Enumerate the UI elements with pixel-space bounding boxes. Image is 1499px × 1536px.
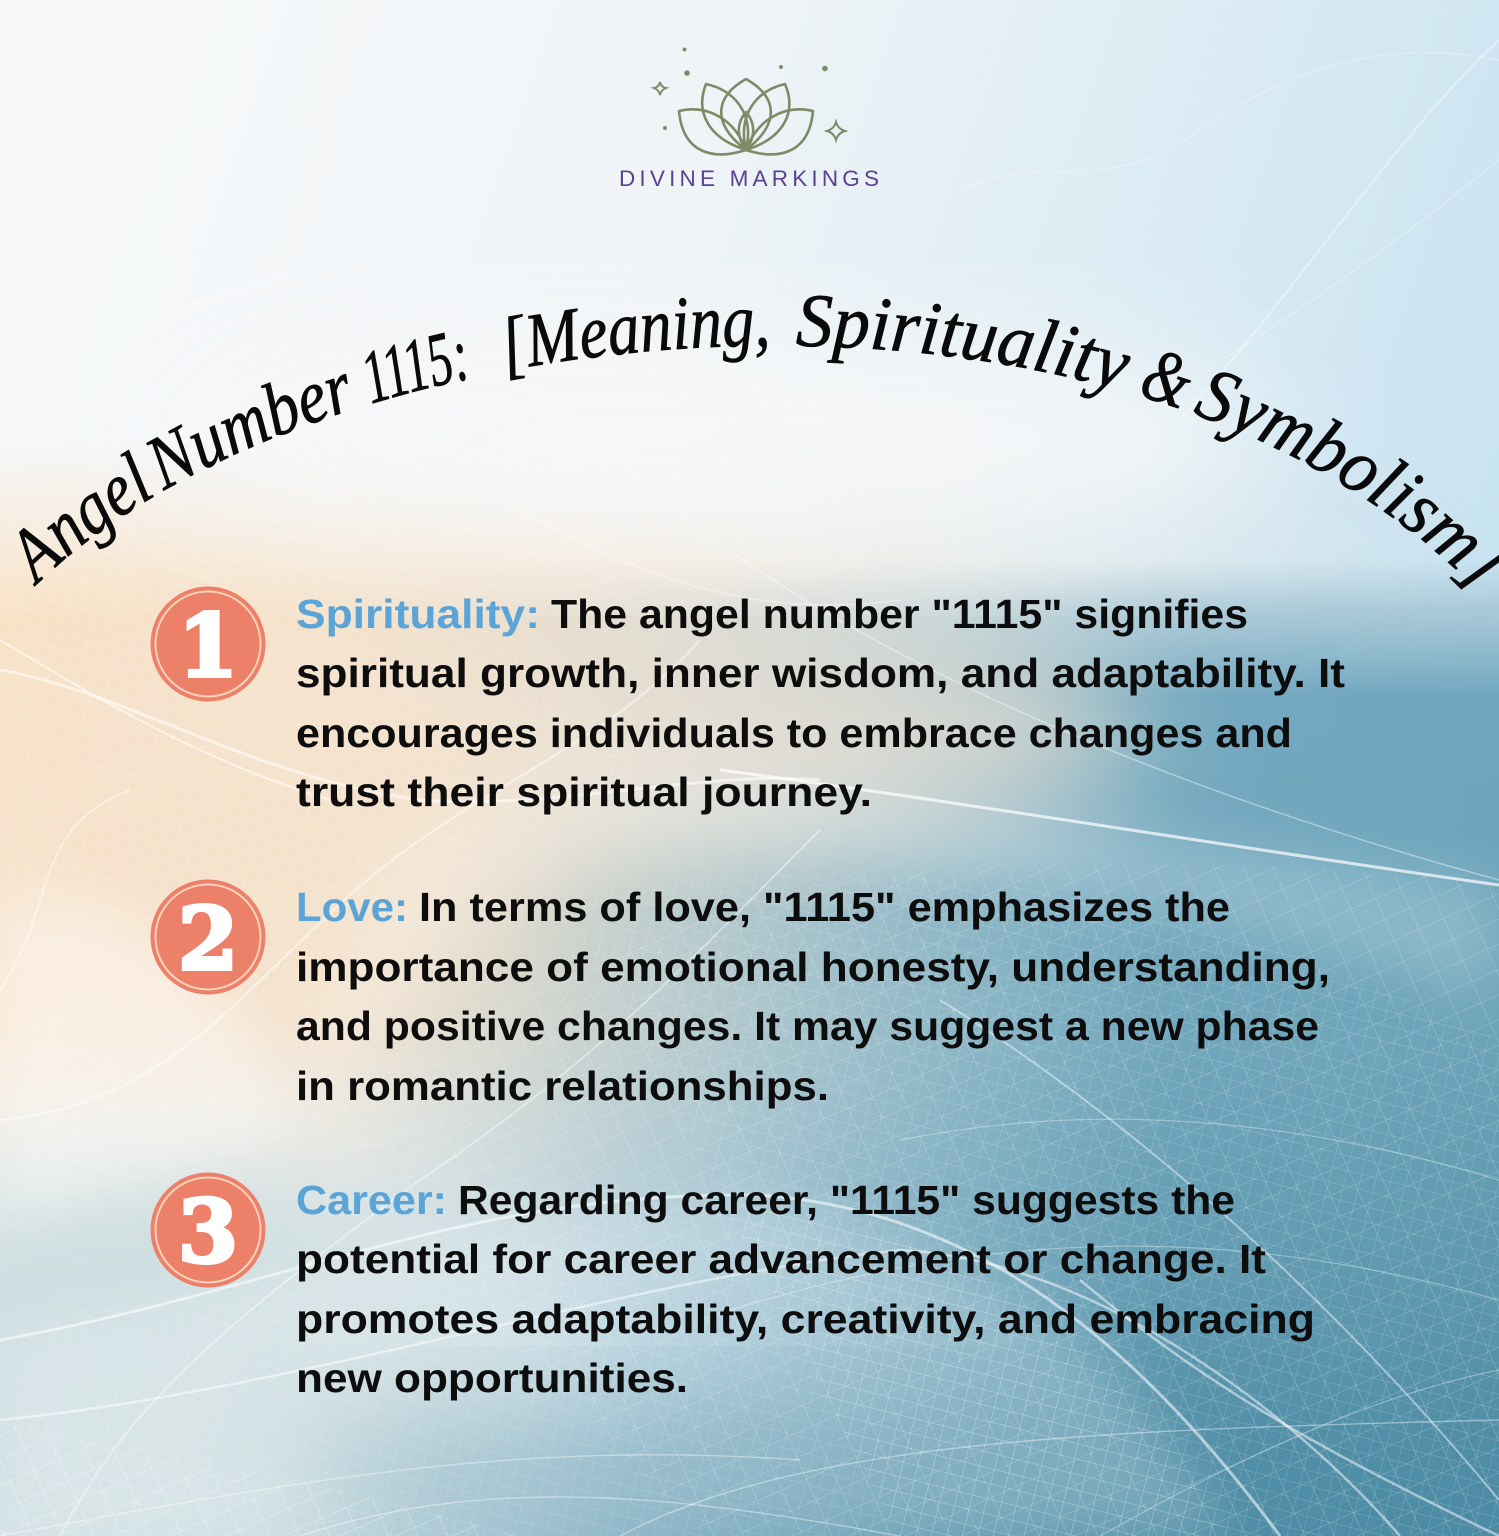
text: career: Career: bbox=[296, 1177, 447, 1223]
text: spirituality bbox=[296, 591, 1345, 815]
title: Spirituality bbox=[796, 296, 1131, 398]
text: love bbox=[296, 884, 1330, 1109]
text: career bbox=[296, 1177, 1315, 1401]
title bbox=[19, 296, 1499, 590]
text: love: importance of emotional honesty, understanding, bbox=[296, 944, 1330, 990]
icon: lotus bbox=[679, 79, 813, 154]
text: spirituality: The angel number "1115" signifies bbox=[551, 591, 1248, 637]
panel: spirituality bbox=[150, 586, 1345, 815]
badge 2 bbox=[150, 880, 266, 994]
title: 1115: bbox=[365, 332, 466, 404]
badge 1 bbox=[150, 586, 266, 702]
text: career: Regarding career, "1115" suggests the bbox=[458, 1177, 1235, 1223]
text: love: in romantic relationships. bbox=[296, 1063, 829, 1109]
text: spirituality: trust their spiritual journey. bbox=[296, 769, 872, 815]
text: spirituality: Spirituality: bbox=[296, 591, 540, 637]
text: career: potential for career advancement or change. It bbox=[296, 1236, 1266, 1282]
text: career: new opportunities. bbox=[296, 1355, 688, 1401]
panel: career bbox=[150, 1172, 1315, 1401]
logo wordmark: DIVINE MARKINGS bbox=[619, 166, 879, 191]
text: love: In terms of love, "1115" emphasizes the bbox=[419, 884, 1230, 930]
logo: Divine Markings bbox=[619, 48, 879, 191]
title: [Meaning, bbox=[508, 298, 767, 381]
title: Number bbox=[146, 374, 348, 492]
badge 3 bbox=[150, 1172, 266, 1288]
text: spirituality: spiritual growth, inner wisdom, and adaptability. It bbox=[296, 650, 1345, 696]
badge 2: 2 bbox=[178, 889, 238, 990]
text: love: and positive changes. It may suggest a new phase bbox=[296, 1003, 1319, 1049]
panel: love bbox=[150, 880, 1330, 1109]
icon: stars bbox=[654, 48, 845, 140]
text: career: promotes adaptability, creativity, and embracing bbox=[296, 1296, 1315, 1342]
text: love: Love: bbox=[296, 884, 408, 930]
title: & bbox=[1142, 352, 1192, 409]
badge 1: 1 bbox=[178, 596, 238, 697]
badge 3: 3 bbox=[178, 1182, 238, 1283]
text: spirituality: encourages individuals to embrace changes and bbox=[296, 710, 1292, 756]
